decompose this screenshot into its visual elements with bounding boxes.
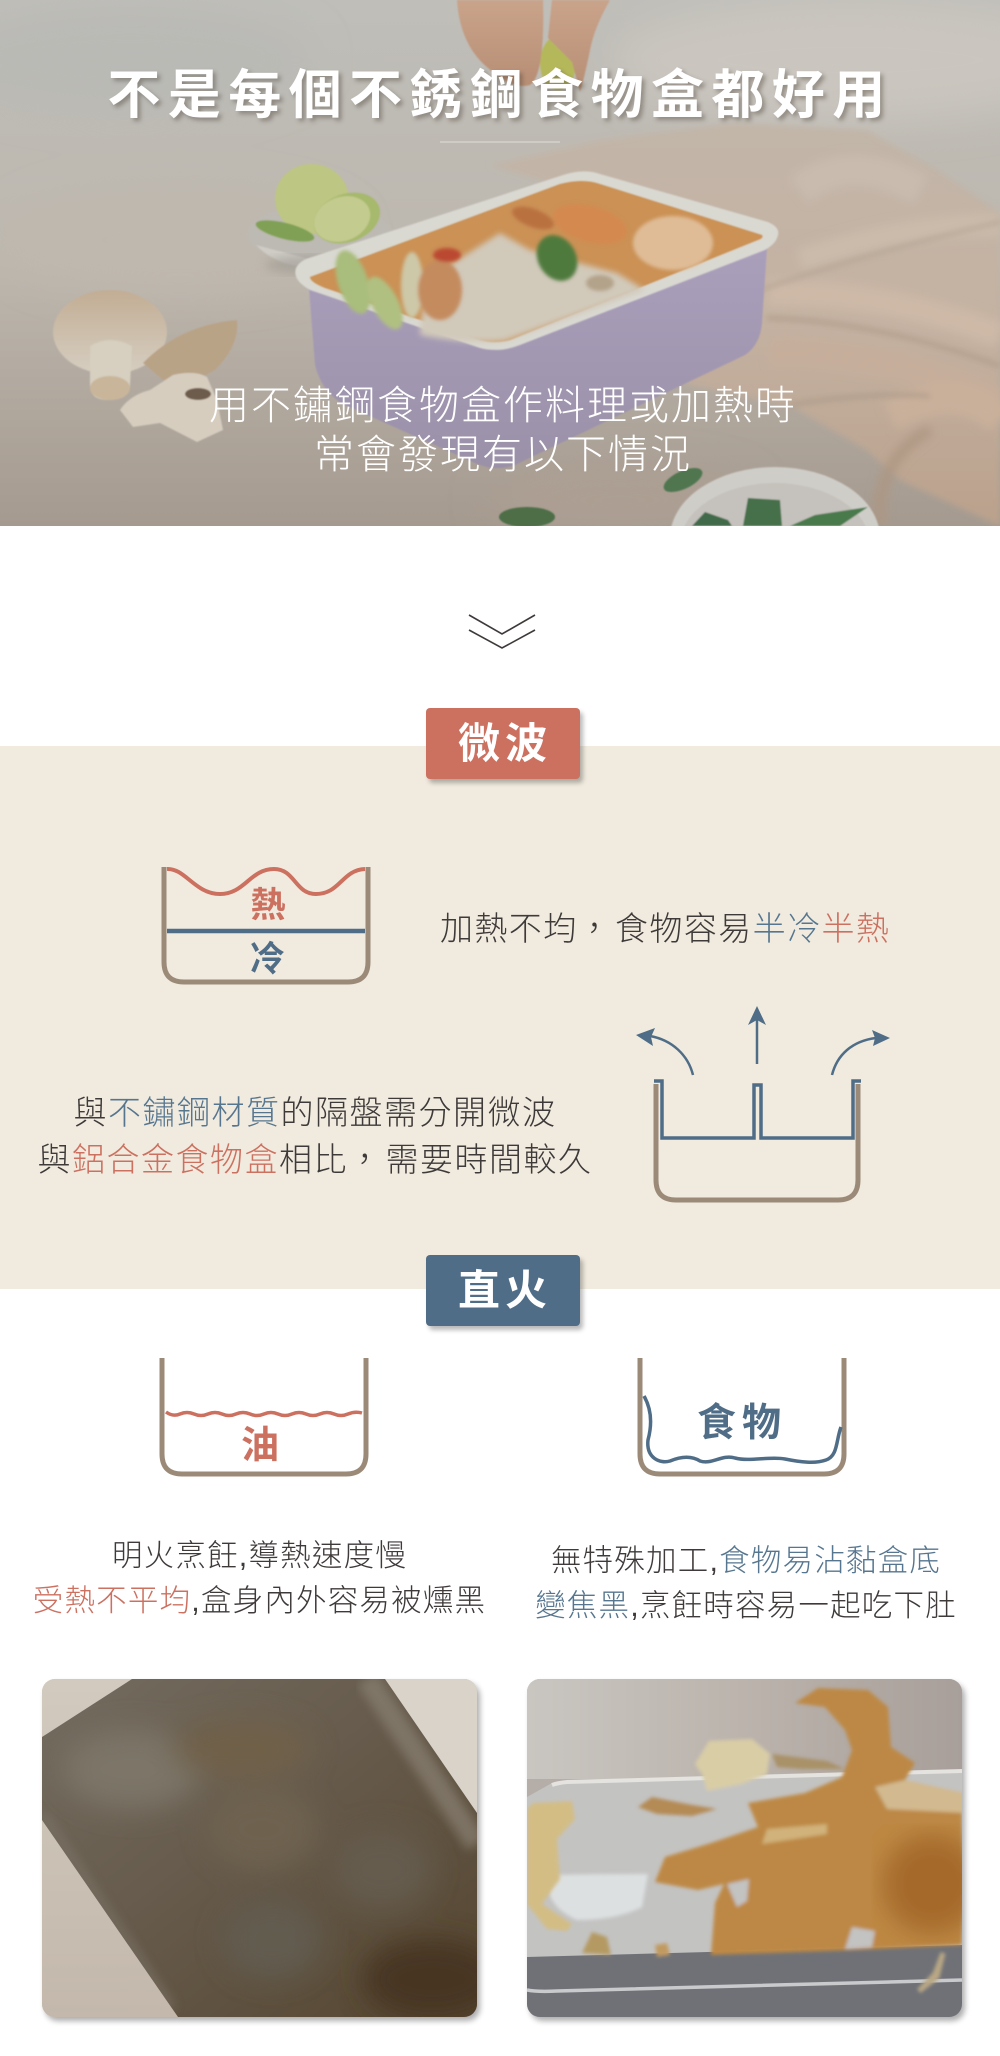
icon: pot with oil line (160, 1358, 368, 1476)
mushrooms (53, 290, 237, 442)
icon: double chevron down (468, 614, 536, 649)
text: food sticks to bottom: 變焦黑,烹飪時容易一起吃下肚 (535, 1589, 957, 1623)
text: flame cooking blackens box (33, 1539, 486, 1618)
text: separate divider and longer time (38, 1094, 592, 1181)
hero subtitle: 常會發現有以下情況 (314, 433, 692, 477)
text: flame cooking blackens box: 受熱不平均,盒身內外容易被燻黑 (33, 1584, 486, 1618)
icon: pot with food stuck on bottom: 食物 (697, 1402, 787, 1445)
text: flame cooking blackens box: 明火烹飪,導熱速度慢 (112, 1539, 407, 1573)
photo: burnt food stuck in tray (527, 1679, 962, 2017)
text: separate divider and longer time: 與鋁合金食物盒相比，需要時間較久 (38, 1133, 592, 1181)
icon: pot with oil line: 油 (241, 1425, 279, 1467)
hand with lime (457, 0, 610, 92)
icon: divider tray with steam arrows (636, 1006, 890, 1202)
hero photo: lavender food box with soup on linen (0, 0, 1000, 526)
badge: microwave heading: 微波 (458, 720, 552, 767)
badge: open flame heading (426, 1255, 580, 1326)
food box (295, 171, 778, 468)
icon: pot with hot top and cold bottom: 熱 (250, 886, 286, 925)
hero subtitle (209, 384, 797, 477)
icon: pot with food stuck on bottom (638, 1358, 846, 1476)
hero subtitle: 用不鏽鋼食物盒作料理或加熱時 (209, 384, 797, 428)
photo: blackened box (42, 1679, 477, 2017)
badge: microwave heading (426, 708, 580, 779)
bottom bowl and herbs (499, 463, 880, 609)
icon: pot with hot top and cold bottom: 冷 (249, 940, 285, 979)
icon: pot with hot top and cold bottom (162, 867, 370, 984)
text: uneven heating: 加熱不均，食物容易半冷半熱 (440, 902, 890, 950)
text: separate divider and longer time: 與不鏽鋼材質的隔盤需分開微波 (74, 1094, 556, 1131)
text: food sticks to bottom: 無特殊加工,食物易沾黏盒底 (551, 1544, 941, 1578)
text: food sticks to bottom (535, 1544, 957, 1623)
badge: open flame heading: 直火 (458, 1267, 552, 1314)
lime bowl (247, 159, 393, 275)
title: 不是每個不銹鋼食物盒都好用 (107, 66, 893, 125)
panel: microwave background (0, 746, 1000, 1289)
title divider (440, 141, 560, 143)
